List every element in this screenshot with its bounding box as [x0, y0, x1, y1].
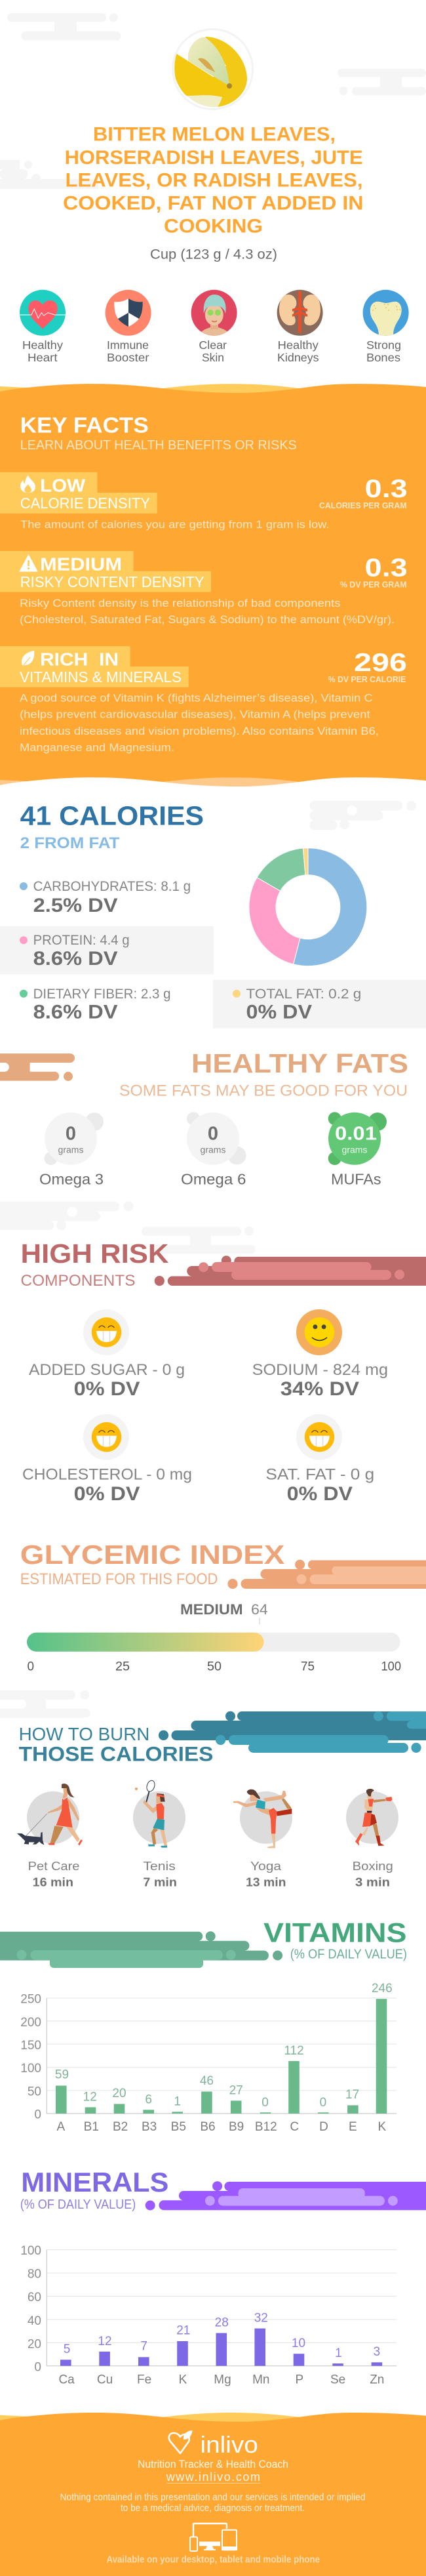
bar chart: vitamins: 46 [200, 2074, 214, 2088]
legend: total fat: TOTAL FAT: 0.2 g [246, 987, 361, 1002]
fact: rich in vitamins and minerals: A good source of Vitamin K (fights Alzheimer’s disease), Vitamin C [20, 693, 373, 705]
risk: added sugar [29, 1309, 185, 1400]
benefit: healthy heart: Heart [28, 351, 58, 364]
bar chart: vitamins: 27 [229, 2083, 243, 2098]
fact: low calorie density: LOW [40, 475, 86, 496]
bar chart: minerals: 80 [28, 2268, 41, 2281]
glycemic index gauge: 64 [251, 1601, 268, 1618]
heading: vitamins [263, 1917, 407, 1961]
risk: sodium: 34% DV [281, 1378, 359, 1400]
legend: dietary fiber: DIETARY FIBER: 2.3 g [33, 987, 171, 1002]
risk: sodium [252, 1309, 388, 1400]
risk: saturated fat: SAT. FAT - 0 g [265, 1465, 374, 1484]
bar chart: vitamins: B12 [255, 2120, 277, 2134]
activity: boxing: Boxing [353, 1859, 393, 1873]
benefit: immune booster: Booster [107, 351, 149, 364]
bar chart: minerals: K [179, 2373, 187, 2387]
fact: rich in vitamins and minerals: 296 [354, 649, 407, 677]
heading: minerals: MINERALS [21, 2167, 168, 2198]
bar chart: minerals: 1 [335, 2346, 342, 2360]
heading: how to burn: THOSE CALORIES [19, 1742, 213, 1766]
activity: yoga: 13 min [246, 1876, 286, 1889]
heading: healthy fats [119, 1048, 408, 1099]
background cloud: left of title [0, 160, 98, 189]
bar chart: vitamins: 59 [55, 2068, 69, 2082]
glycemic index gauge: 25 [115, 1660, 130, 1674]
legend: protein [0, 926, 214, 975]
benefit: healthy kidneys [277, 290, 323, 364]
footer: disclaimer: to be a medical advice, diagnosis or treatment. [121, 2503, 305, 2514]
fact: medium risky content density [0, 551, 408, 626]
fact: low calorie density: The amount of calories you are getting from 1 gram is low. [20, 519, 329, 531]
background cloud: calories [309, 801, 416, 830]
glycemic index gauge: 75 [301, 1660, 315, 1674]
fact: rich in vitamins and minerals: % DV PER CALORIE [328, 675, 406, 684]
fact: medium risky content density: % DV PER GRAM [340, 580, 406, 589]
bar chart: minerals: 3 [374, 2345, 380, 2359]
title: BITTER MELON LEAVES, [93, 124, 336, 146]
glycemic index gauge: 100 [381, 1660, 401, 1674]
fat: omega 3: 0 [66, 1124, 76, 1145]
logo: inlivo [169, 2430, 258, 2458]
heading: key facts: LEARN ABOUT HEALTH BENEFITS OR RISKS [20, 438, 297, 453]
fact: low calorie density: CALORIES PER GRAM [319, 501, 406, 510]
fact: low calorie density [0, 472, 408, 531]
fat: omega 3: Omega 3 [39, 1171, 104, 1188]
footer: tagline: Nutrition Tracker & Health Coach [138, 2458, 288, 2470]
panel: footer background [0, 2413, 426, 2576]
decoration: healthy fats [0, 1053, 75, 1081]
heading: vitamins: VITAMINS [263, 1917, 406, 1948]
bar chart: vitamins: A [56, 2120, 65, 2134]
fact: low calorie density: 0.3 [365, 475, 408, 503]
fact: medium risky content density: Risky Content density is the relationship of bad components [20, 598, 341, 609]
fat: mufas: grams [342, 1144, 367, 1155]
fat: omega 3: grams [58, 1144, 83, 1155]
bar chart: minerals: 10 [292, 2337, 305, 2350]
risk: sodium: SODIUM - 824 mg [252, 1361, 388, 1379]
benefit: healthy kidneys: Healthy [278, 338, 319, 352]
footer: disclaimer [60, 2492, 365, 2514]
benefit: strong bones [363, 290, 409, 364]
bar chart: vitamins: 112 [284, 2044, 304, 2058]
bar chart: vitamins: B5 [171, 2120, 186, 2134]
glycemic index gauge: MEDIUM [180, 1601, 243, 1618]
bar chart: minerals: Cu [97, 2373, 113, 2387]
activity: tennis: 7 min [143, 1876, 177, 1889]
serving size: Cup (123 g / 4.3 oz) [150, 247, 277, 262]
fact: medium risky content density: RISKY CONTENT DENSITY [20, 573, 204, 590]
bar chart: minerals: 60 [28, 2291, 41, 2304]
heading: healthy fats: HEALTHY FATS [191, 1048, 408, 1078]
fat: omega 6: Omega 6 [181, 1171, 246, 1188]
heading: glycemic index: GLYCEMIC INDEX [20, 1540, 284, 1570]
decoration: vitamins [0, 1931, 282, 1968]
fact: medium risky content density: 0.3 [365, 554, 408, 582]
bar chart: vitamins: D [319, 2120, 328, 2134]
bar chart: vitamins: 200 [20, 2016, 41, 2030]
legend: total fat: 0% DV [246, 1002, 312, 1023]
bar chart: minerals: 20 [28, 2338, 41, 2351]
activity: boxing [346, 1789, 398, 1889]
legend: dietary fiber [20, 987, 171, 1023]
risk: saturated fat: 0% DV [287, 1483, 353, 1505]
benefit: clear skin: Skin [202, 351, 224, 364]
risk: cholesterol: 0% DV [74, 1483, 140, 1505]
heading: healthy fats: SOME FATS MAY BE GOOD FOR YOU [119, 1082, 408, 1099]
heading: how to burn: HOW TO BURN [19, 1724, 149, 1744]
benefit: healthy heart: Healthy [22, 338, 63, 352]
bar chart: minerals: 100 [20, 2244, 41, 2258]
logo: inlivo: inlivo [201, 2431, 258, 2458]
heading: high risk: COMPONENTS [21, 1272, 135, 1290]
bar chart: minerals: 5 [64, 2342, 70, 2356]
legend: carbohydrates [20, 879, 191, 916]
fat: omega 6: grams [201, 1144, 225, 1155]
fact: rich in vitamins and minerals: RICH IN [40, 649, 119, 669]
fat: mufas [328, 1112, 387, 1188]
icon: devices [190, 2524, 237, 2551]
background cloud: top left [7, 13, 121, 41]
activity: pet care: 16 min [33, 1876, 73, 1889]
bar chart: minerals: 21 [176, 2324, 190, 2338]
activity: yoga: Yoga [250, 1859, 282, 1873]
bar chart: vitamins: 246 [372, 1982, 393, 1995]
heading: vitamins: (% OF DAILY VALUE) [290, 1947, 407, 1961]
fact: low calorie density: CALORIE DENSITY [20, 495, 150, 512]
bar chart: vitamins: 250 [20, 1993, 41, 2006]
food image: bitter melon [173, 29, 253, 109]
fact: rich in vitamins and minerals: VITAMINS & MINERALS [20, 668, 182, 685]
panel: key facts background [0, 384, 426, 797]
bar chart: vitamins: E [349, 2120, 357, 2134]
activity: pet care: Pet Care [28, 1859, 79, 1873]
background cloud: high risk left [0, 1201, 134, 1231]
title [63, 124, 364, 237]
risk: added sugar: 0% DV [74, 1378, 140, 1400]
background cloud: high risk right [142, 1227, 256, 1254]
benefit: strong bones: Bones [366, 351, 400, 364]
bar chart: vitamins: 0 [34, 2108, 41, 2121]
risk: cholesterol [22, 1414, 192, 1505]
bar chart: minerals: 40 [28, 2314, 41, 2328]
bar chart: vitamins: 0 [261, 2096, 269, 2110]
footer: website link: www.inlivo.com [166, 2470, 260, 2484]
heading: glycemic index [20, 1540, 284, 1588]
benefit: immune booster [106, 290, 151, 364]
decoration: minerals [145, 2181, 426, 2211]
activity: tennis: Tenis [143, 1859, 176, 1873]
glycemic index gauge: 0 [28, 1660, 34, 1674]
bar chart: vitamins: 20 [112, 2087, 126, 2100]
benefit: clear skin [191, 290, 237, 364]
glycemic index gauge [27, 1601, 401, 1674]
bar chart: minerals [20, 2244, 397, 2387]
heading: minerals [20, 2167, 168, 2212]
legend: dietary fiber: 8.6% DV [33, 1002, 118, 1023]
title: COOKING [164, 215, 263, 237]
benefit: clear skin: Clear [199, 338, 227, 352]
heading: high risk: HIGH RISK [21, 1238, 169, 1269]
bar chart: vitamins: B2 [113, 2120, 128, 2134]
benefit: strong bones: Strong [366, 338, 401, 352]
heading: minerals: (% OF DAILY VALUE) [20, 2198, 136, 2212]
donut chart: macronutrients [249, 848, 367, 966]
legend: carbohydrates: CARBOHYDRATES: 8.1 g [33, 879, 191, 894]
heading: calories: 41 CALORIES [20, 800, 204, 830]
bar chart: vitamins: 12 [83, 2090, 97, 2104]
heading: glycemic index: ESTIMATED FOR THIS FOOD [20, 1570, 218, 1588]
activity: tennis [133, 1780, 185, 1889]
glycemic index gauge: 50 [207, 1660, 222, 1674]
bar chart: minerals: 28 [215, 2316, 229, 2330]
activity: pet care [17, 1784, 83, 1889]
bar chart: vitamins: B1 [84, 2120, 99, 2134]
risk: added sugar: ADDED SUGAR - 0 g [29, 1361, 185, 1379]
bar chart: vitamins: B9 [229, 2120, 244, 2134]
decoration: high risk [155, 1256, 426, 1286]
bar chart: vitamins: C [290, 2120, 299, 2134]
risk: cholesterol: CHOLESTEROL - 0 mg [22, 1465, 192, 1484]
benefit: healthy kidneys: Kidneys [277, 351, 319, 364]
benefit: healthy heart [20, 290, 66, 364]
heading: key facts: KEY FACTS [20, 413, 149, 437]
bar chart: minerals: P [295, 2373, 303, 2387]
decoration: burn calories [159, 1711, 426, 1753]
legend: protein: 8.6% DV [33, 948, 118, 970]
fat: omega 6 [181, 1112, 246, 1188]
bar chart: vitamins: 150 [20, 2039, 41, 2053]
bar chart: vitamins: 50 [28, 2085, 41, 2099]
fact: rich in vitamins and minerals: Manganese and Magnesium. [20, 742, 174, 754]
bar chart: minerals: 0 [34, 2360, 41, 2374]
fat: mufas: 0.01 [335, 1124, 377, 1145]
heading: key facts [20, 413, 297, 453]
bar chart: vitamins: K [378, 2120, 386, 2134]
bar chart: vitamins: B6 [200, 2120, 216, 2134]
footer: availability note: Available on your desktop, tablet and mobile phone [106, 2554, 320, 2565]
bar chart: minerals: 32 [254, 2312, 268, 2325]
fact: rich in vitamins and minerals: (helps prevent cardiovascular diseases), Vitamin A (helps prevent [20, 709, 370, 721]
bar chart: minerals: Mg [214, 2373, 231, 2387]
activity: boxing: 3 min [355, 1876, 390, 1889]
background cloud: burn [0, 1690, 90, 1717]
heading: high risk [21, 1238, 169, 1290]
bar chart: minerals: Zn [370, 2373, 384, 2387]
fact: medium risky content density: MEDIUM [40, 554, 122, 575]
risk: saturated fat [265, 1414, 374, 1505]
fat: omega 6: 0 [208, 1124, 218, 1145]
legend: protein: PROTEIN: 4.4 g [33, 933, 130, 948]
bar chart: minerals: Mn [252, 2373, 270, 2387]
fact: rich in vitamins and minerals [0, 646, 407, 754]
bar chart: vitamins: 1 [174, 2095, 181, 2108]
bar chart: minerals: Ca [58, 2373, 75, 2387]
fat: mufas: MUFAs [331, 1171, 381, 1188]
fact: rich in vitamins and minerals: infectious diseases and vision problems). Also contains Vitamin B6, [20, 726, 379, 737]
fat: omega 3 [39, 1113, 104, 1188]
fact: medium risky content density: (Cholesterol, Saturated Fat, Sugars & Sodium) to the amount (%DV/gr). [20, 614, 395, 626]
bar chart: minerals: Fe [137, 2373, 151, 2387]
title: COOKED, FAT NOT ADDED IN [63, 193, 364, 214]
legend: total fat [213, 980, 426, 1029]
title: LEAVES, OR RADISH LEAVES, [66, 170, 363, 192]
activity: yoga [233, 1789, 292, 1889]
footer: disclaimer: Nothing contained in this presentation and our services is intended or implied [60, 2492, 365, 2503]
bar chart: minerals: Se [330, 2373, 345, 2387]
legend: carbohydrates: 2.5% DV [33, 895, 118, 916]
background cloud: top right [338, 69, 426, 96]
bar chart: minerals: 12 [98, 2335, 112, 2348]
bar chart: vitamins: 6 [145, 2093, 152, 2106]
heading: calories: 2 FROM FAT [20, 834, 119, 852]
heading: how to burn [19, 1724, 213, 1766]
bar chart: vitamins: 0 [320, 2096, 326, 2110]
bar chart: minerals: 7 [140, 2339, 147, 2354]
bar chart: vitamins: 100 [20, 2062, 41, 2075]
bar chart: vitamins: B3 [142, 2120, 157, 2134]
bar chart: vitamins: 17 [345, 2088, 359, 2102]
decoration: glycemic index [227, 1560, 426, 1589]
heading: calories [20, 800, 204, 852]
bar chart: vitamins [20, 1982, 397, 2134]
title: HORSERADISH LEAVES, JUTE [65, 147, 363, 169]
benefit: immune booster: Immune [107, 338, 149, 352]
